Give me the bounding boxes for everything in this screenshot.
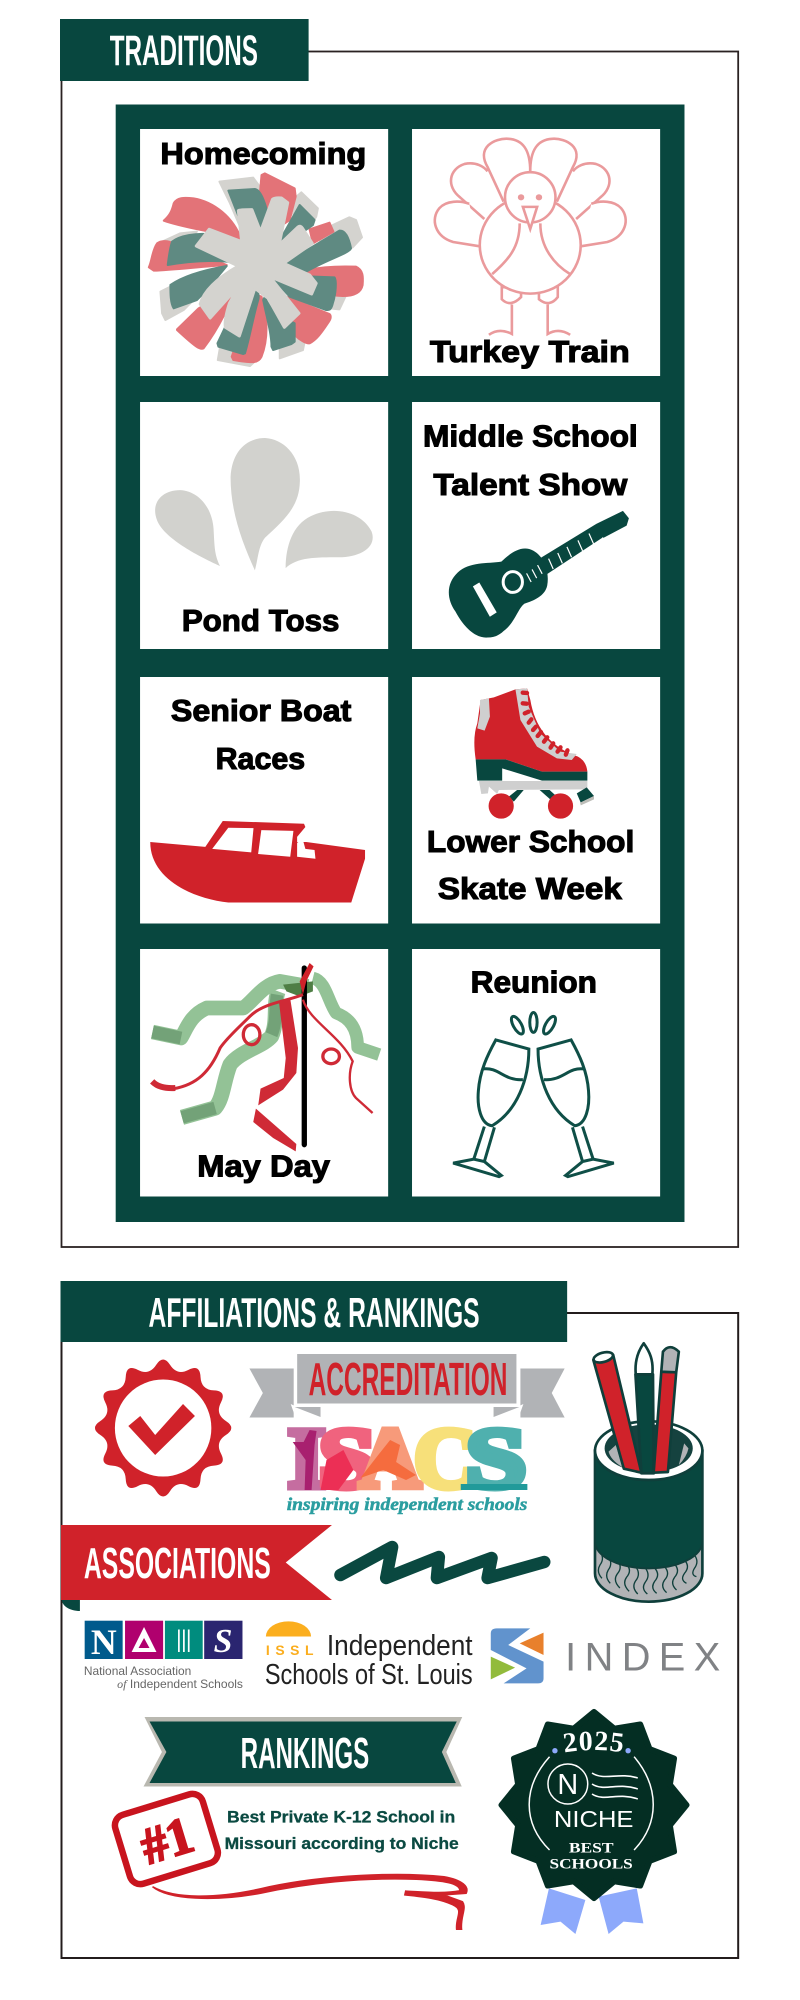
logo: NAIS: National Association (84, 1666, 191, 1678)
icon: red check badge (95, 1359, 231, 1497)
logo: ISACS (287, 1411, 527, 1514)
icon: turkey (435, 139, 626, 335)
logo: ISACS: S (466, 1411, 526, 1506)
logo: NAIS: S (214, 1623, 232, 1660)
icon: number one stamp: #1 (134, 1806, 200, 1876)
decoration: red ribbon swoosh (153, 1874, 467, 1929)
icon: maypole with ribbons (152, 963, 379, 1151)
heading: traditions: TRADITIONS (110, 27, 258, 75)
logo: ISACS: inspiring independent schools (287, 1494, 527, 1514)
icon: pencil cup (592, 1343, 702, 1602)
logo: NAIS: N (91, 1622, 117, 1662)
cell: homecoming: Homecoming (160, 136, 366, 171)
heading: affiliations and rankings: AFFILIATIONS & RANKINGS (149, 1289, 480, 1336)
cell: middle school talent show: Talent Show (433, 467, 628, 502)
logo: ISSL: Schools of St. Louis (265, 1659, 473, 1691)
cell: middle school talent show (412, 402, 660, 649)
logo: ISSL (265, 1621, 473, 1691)
banner: associations: ASSOCIATIONS (84, 1539, 271, 1588)
logo: INDEX (491, 1628, 720, 1683)
cell: turkey train: Turkey Train (430, 334, 630, 369)
banner: associations (61, 1525, 332, 1611)
heading: traditions (60, 19, 309, 81)
logo: NAIS: III (176, 1623, 191, 1659)
badge: niche 2025 best schools: BEST (569, 1841, 614, 1857)
badge: niche 2025 best schools: SCHOOLS (550, 1856, 633, 1872)
logo: ISACS: S (319, 1411, 376, 1506)
cell: lower school skate week: Lower School (427, 824, 634, 859)
decoration: green squiggle (340, 1547, 544, 1578)
banner: accreditation: ACCREDITATION (309, 1353, 507, 1405)
icon: roller skate (474, 688, 594, 819)
cell: reunion (412, 949, 660, 1196)
heading: affiliations and rankings (61, 1281, 567, 1342)
logo: ISSL: ISSL (266, 1642, 314, 1658)
cell: pond toss: Pond Toss (182, 603, 339, 638)
logo: ISACS: C (414, 1411, 477, 1506)
cell: senior boat races: Senior Boat (171, 693, 351, 728)
cell: lower school skate week (412, 677, 660, 924)
badge: niche 2025 best schools: N (557, 1769, 578, 1801)
text: ranking claim: Missouri according to Niche (225, 1835, 459, 1853)
cell: reunion: Reunion (471, 964, 597, 1000)
banner: rankings (144, 1717, 462, 1786)
cell: senior boat races (140, 677, 388, 924)
icon: boat (150, 821, 365, 902)
cell: turkey train (412, 129, 660, 376)
cell: middle school talent show: Middle School (423, 418, 638, 454)
icon: guitar (449, 511, 629, 638)
cell: may day: May Day (197, 1148, 331, 1184)
badge: niche 2025 best schools: 2025 (564, 1732, 623, 1752)
logo: INDEX: INDEX (565, 1636, 720, 1680)
cell: pond toss (140, 402, 388, 649)
logo: ISACS: A (359, 1411, 421, 1506)
icon: water splash (155, 438, 373, 570)
cell: senior boat races: Races (216, 741, 305, 776)
badge: niche 2025 best schools (498, 1708, 690, 1934)
icon: number one stamp (112, 1791, 221, 1887)
cell: may day (140, 949, 388, 1196)
icon: champagne glasses (453, 1012, 614, 1177)
cell: homecoming (140, 129, 388, 376)
banner: rankings: RANKINGS (241, 1729, 369, 1778)
cell: lower school skate week: Skate Week (438, 871, 623, 906)
logo: ISACS: I (288, 1411, 326, 1506)
icon: pom-pom (149, 173, 363, 366)
logo: ISSL: Independent (327, 1630, 473, 1662)
panel: affiliations and rankings (60, 1281, 740, 1959)
green grid background (116, 104, 684, 1222)
text: ranking claim: Best Private K-12 School in (227, 1808, 455, 1827)
logo: NAIS (84, 1621, 243, 1691)
banner: accreditation (249, 1351, 565, 1418)
panel: traditions (60, 19, 738, 1247)
text: ranking claim (225, 1808, 459, 1853)
badge: niche 2025 best schools: NICHE (554, 1806, 633, 1832)
logo: NAIS: of Independent Schools (117, 1679, 243, 1691)
